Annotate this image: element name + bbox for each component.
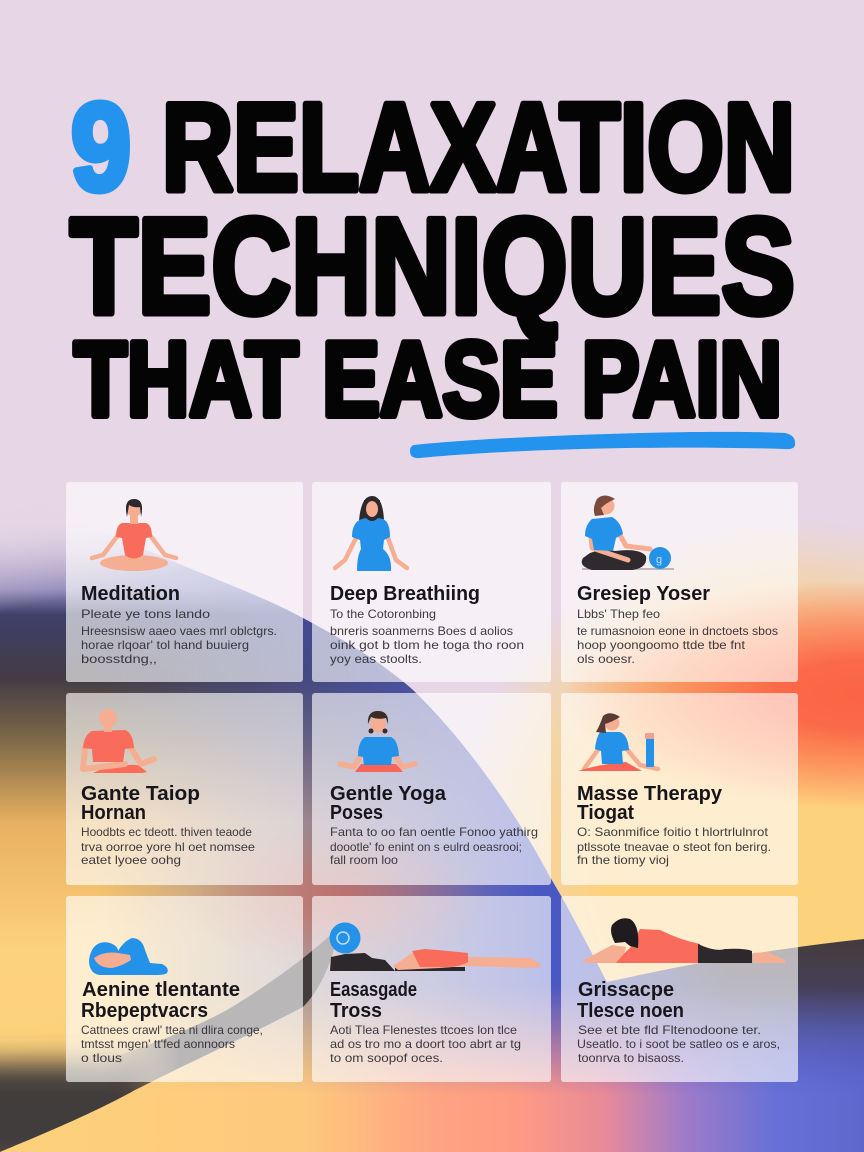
icon: seated yoga person <box>340 711 415 772</box>
icon: meditating person <box>92 499 176 571</box>
description text: Pleate ye tons lando <box>81 607 210 621</box>
title <box>70 78 795 438</box>
heading: Meditation <box>81 583 180 605</box>
icon: seated person with ball <box>582 496 674 570</box>
description text: ols ooesr. <box>577 652 635 666</box>
description text: fall room loo <box>330 853 398 867</box>
heading <box>577 783 723 824</box>
description text: Fanta to oo fan oentle Fonoo yathirg <box>330 825 538 839</box>
panel: meditation <box>66 482 303 682</box>
description text <box>577 825 771 867</box>
description text <box>330 825 538 867</box>
heading: Rbepeptvacrs <box>81 1000 208 1022</box>
description text: yoy eas stoolts. <box>330 652 422 666</box>
description text: oink got b tlom he toga tho roon <box>330 638 524 652</box>
panel: aenine tlentante rbepeptvacrs <box>66 896 303 1082</box>
heading: Aenine tlentante <box>82 979 240 1001</box>
icon: seated person with bottle <box>578 713 658 771</box>
icon: bald seated man <box>83 709 154 773</box>
description text: o tlous <box>81 1051 122 1065</box>
description text: Lbbs' Thep feo <box>577 607 660 621</box>
panel: gentle yoga poses <box>312 693 551 885</box>
title underline <box>410 432 795 458</box>
heading <box>330 979 417 1022</box>
description text: toonrva to bisaoss. <box>578 1051 684 1065</box>
icon: person curled up resting <box>89 938 168 975</box>
heading: Grissacpe <box>578 979 674 1001</box>
description text: Cattnees crawl' ttea ni dlira conge, <box>81 1023 263 1037</box>
heading: Masse Therapy <box>577 783 723 805</box>
description text: to om soopof oces. <box>330 1051 443 1065</box>
description text: te rumasnoion eone in dnctoets sbos <box>577 624 778 638</box>
description text <box>577 607 778 666</box>
heading: Poses <box>330 802 383 824</box>
heading <box>81 979 240 1022</box>
description text: Hreesnsisw aaeo vaes mrl oblctgrs. <box>81 624 277 638</box>
icon: person lying with ball <box>330 922 542 971</box>
description text: eatet lyoee oohg <box>81 853 181 867</box>
description text <box>330 607 524 666</box>
description text: ptlssote tneavae o steot fon berirg. <box>577 840 771 854</box>
description text: ad os tro mo a doort too abrt ar tg <box>330 1037 521 1051</box>
panel: deep breathing <box>312 482 551 682</box>
panel: masse therapy <box>561 693 798 885</box>
heading <box>81 783 200 824</box>
heading: Deep Breathiing <box>330 583 480 605</box>
heading: Gresiep Yoser <box>577 583 710 605</box>
heading: Tlesce noen <box>577 1000 684 1022</box>
description text: fn the tiomy vioj <box>577 853 669 867</box>
icon: seated person with long hair <box>335 496 407 571</box>
description text <box>330 1023 521 1065</box>
description text: Useatlo. to i soot be satleo os e aros, <box>577 1037 780 1051</box>
description text: tmtsst mgen' tt'fed aonnoors <box>81 1037 235 1051</box>
description text <box>81 825 255 867</box>
description text: bnreris soanmerns Boes d aolios <box>330 624 513 638</box>
heading <box>330 783 447 824</box>
background: gradient waves <box>0 530 864 1152</box>
title number 9: 9 <box>71 78 131 217</box>
description text: Aoti Tlea Flenestes ttcoes lon tlce <box>330 1023 517 1037</box>
description text: horae rlqoar' tol hand buuierg <box>81 638 249 652</box>
description text: To the Cotoronbing <box>330 607 436 621</box>
description text: doootle' fo enint on s eulrd oeasrooi; <box>330 840 522 854</box>
description text: O: Saonmifice foitio t hlortrlulnrot <box>577 825 769 839</box>
panel: grissacpe tlesce noen <box>561 896 798 1082</box>
heading: Tross <box>330 1000 382 1022</box>
description text: hoop yoongoomo ttde tbe fnt <box>577 638 746 652</box>
panel: gante taiop hornan <box>66 693 303 885</box>
description text: Hoodbts ec tdeott. thiven teaode <box>81 825 252 839</box>
heading: Tiogat <box>577 802 634 824</box>
description text <box>81 1023 263 1065</box>
heading: Hornan <box>81 802 146 824</box>
panel: easasgade tross <box>312 896 551 1082</box>
description text: boosstdng,, <box>81 652 157 666</box>
description text: See et bte fld Fltenodoone ter. <box>578 1023 761 1037</box>
icon: person lying face down <box>582 918 785 963</box>
icon: seated person with ball: g <box>656 554 662 566</box>
description text: trva oorroe yore hl oet nomsee <box>81 840 255 854</box>
heading: Easasgade <box>330 979 417 1001</box>
heading: Gante Taiop <box>81 783 200 805</box>
heading <box>577 979 684 1022</box>
panel: gresiep yoser <box>561 482 798 682</box>
description text <box>577 1023 780 1065</box>
heading: Gentle Yoga <box>330 783 447 805</box>
description text <box>81 607 277 666</box>
